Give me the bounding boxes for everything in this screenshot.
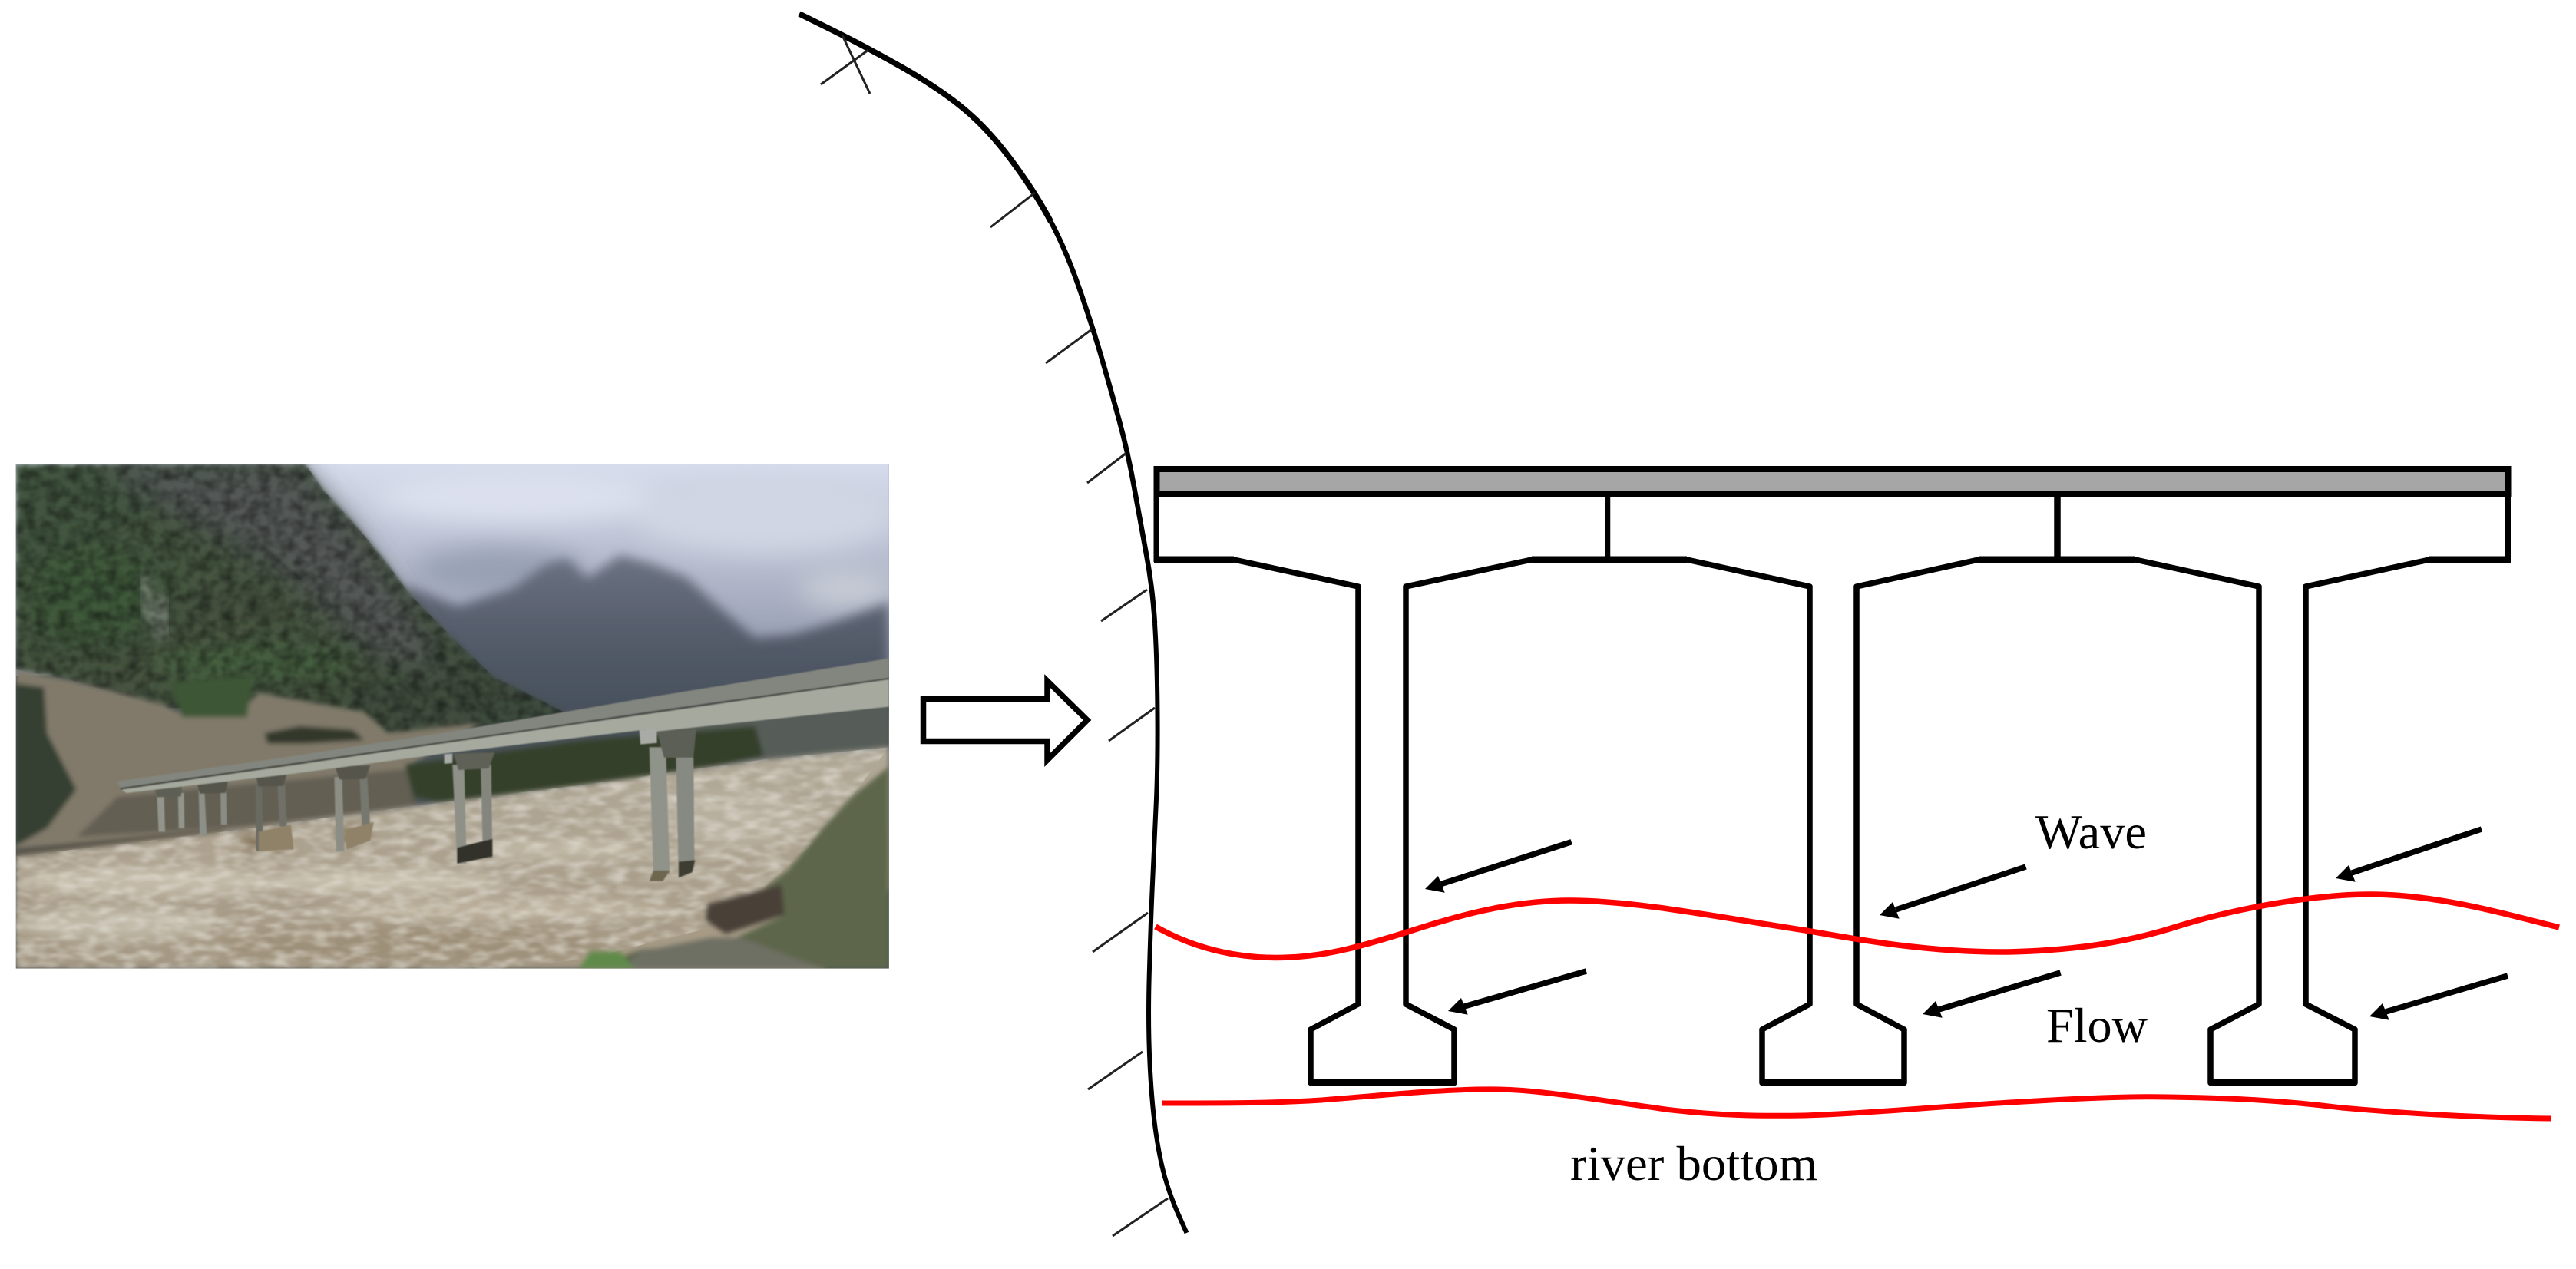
photo distant mountains — [405, 555, 889, 733]
photo bridge piers — [154, 729, 696, 881]
bridge deck slab — [1156, 469, 2508, 494]
hillside profile — [799, 14, 1187, 1236]
photo bridge deck — [117, 659, 889, 788]
hollow block arrow — [923, 681, 1087, 760]
girder dividers — [1156, 495, 2508, 562]
water surface wave line — [1156, 894, 2559, 957]
flow arrow pier 2 — [1923, 973, 2061, 1018]
label: Wave: Wave — [2035, 805, 2147, 859]
hillside curve lower — [1149, 623, 1187, 1233]
photo river water — [16, 747, 889, 969]
photo left mountain — [16, 464, 564, 740]
flow arrow pier 1 — [1448, 971, 1586, 1015]
photo eroded slope — [16, 669, 482, 849]
river bed line — [1162, 1089, 2551, 1119]
photo bridge — [117, 659, 889, 881]
wave arrow pier 3 — [2336, 829, 2482, 882]
photo: flooded river and bridge — [16, 464, 893, 969]
bridge structure — [1154, 469, 2511, 1082]
load arrows — [1425, 829, 2508, 1020]
photo right bank — [579, 767, 889, 969]
photo rock streak — [144, 574, 164, 638]
wave arrow pier 1 — [1425, 842, 1572, 893]
wave arrow pier 2 — [1880, 867, 2025, 919]
bent caps and piers — [1154, 560, 2511, 1082]
flow arrow pier 3 — [2369, 976, 2508, 1020]
photo base tone — [16, 464, 889, 969]
hatch marks — [821, 35, 1168, 1236]
label: Flow: Flow — [2046, 999, 2148, 1053]
hillside curve upper — [799, 14, 1050, 221]
label: river bottom: river bottom — [1570, 1136, 1817, 1191]
hillside curve middle — [1050, 221, 1155, 623]
photo far bank and trees — [16, 698, 889, 858]
thicker footing bases — [1154, 560, 2511, 1082]
photo sky — [16, 464, 889, 676]
photo river foam texture — [16, 747, 889, 969]
photo mountain mottling — [16, 464, 564, 740]
